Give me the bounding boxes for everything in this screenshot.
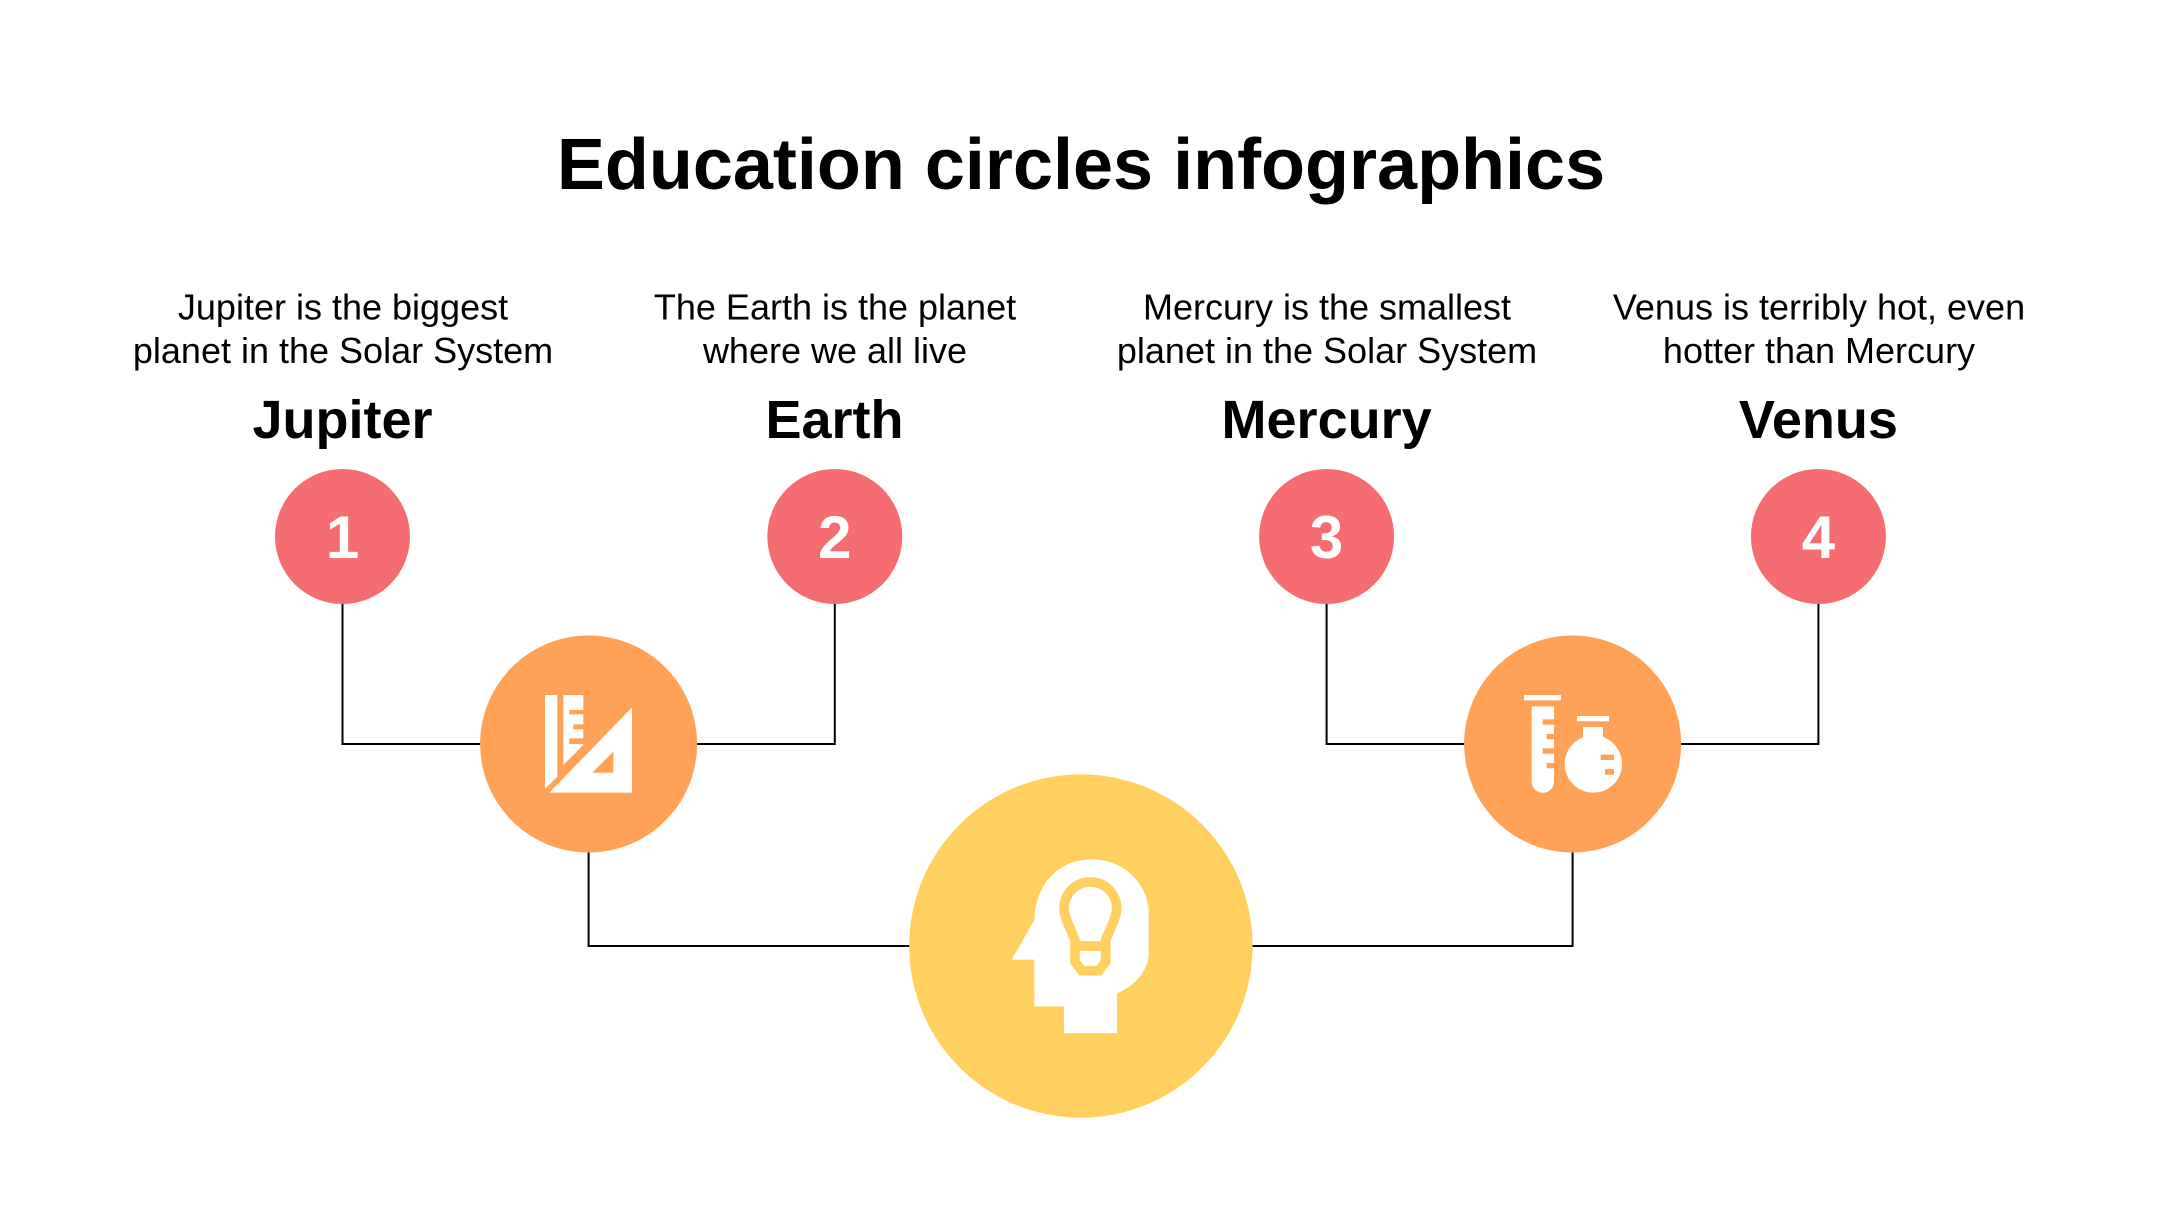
description: Earth: The Earth is the planet <box>654 286 1016 328</box>
description: Jupiter: Jupiter is the biggest <box>178 286 508 328</box>
yellow central circle with icon: head with light bulb <box>909 774 1253 1118</box>
number circle 4 <box>1751 469 1886 604</box>
description: Jupiter: planet in the Solar System <box>133 330 553 371</box>
number circle 3 <box>1259 469 1394 604</box>
orange circle with icon: test tube and flask <box>1464 636 1681 852</box>
icon: head with light bulb <box>1012 859 1149 1033</box>
heading: Jupiter: Jupiter <box>252 390 433 450</box>
heading: Venus: Venus <box>1739 390 1898 450</box>
item 3: Mercury <box>1117 286 1537 604</box>
title: Education circles infographics <box>557 125 1605 205</box>
icon: test tube and flask <box>1524 695 1622 793</box>
description: Mercury: planet in the Solar System <box>1117 330 1537 371</box>
description: Earth: where we all live <box>702 330 967 371</box>
heading: Mercury: Mercury <box>1222 390 1432 450</box>
description: Venus: hotter than Mercury <box>1663 330 1975 371</box>
number circle 1: 1 <box>326 504 359 571</box>
item 1: Jupiter <box>133 286 553 604</box>
connector lines <box>342 600 1818 946</box>
number circle 3: 3 <box>1310 504 1343 571</box>
description: Venus: Venus is terribly hot, even <box>1613 286 2025 328</box>
number circle 1 <box>275 469 410 604</box>
number circle 4: 4 <box>1802 504 1836 571</box>
description: Mercury: Mercury is the smallest <box>1143 286 1511 328</box>
orange circle with icon: ruler and set square <box>480 636 697 852</box>
number circle 2 <box>767 469 902 604</box>
icon: ruler and set square <box>545 695 632 793</box>
heading: Earth: Earth <box>765 390 904 450</box>
number circle 2: 2 <box>818 504 851 571</box>
item 2: Earth <box>654 286 1016 604</box>
item 4: Venus <box>1613 286 2025 604</box>
